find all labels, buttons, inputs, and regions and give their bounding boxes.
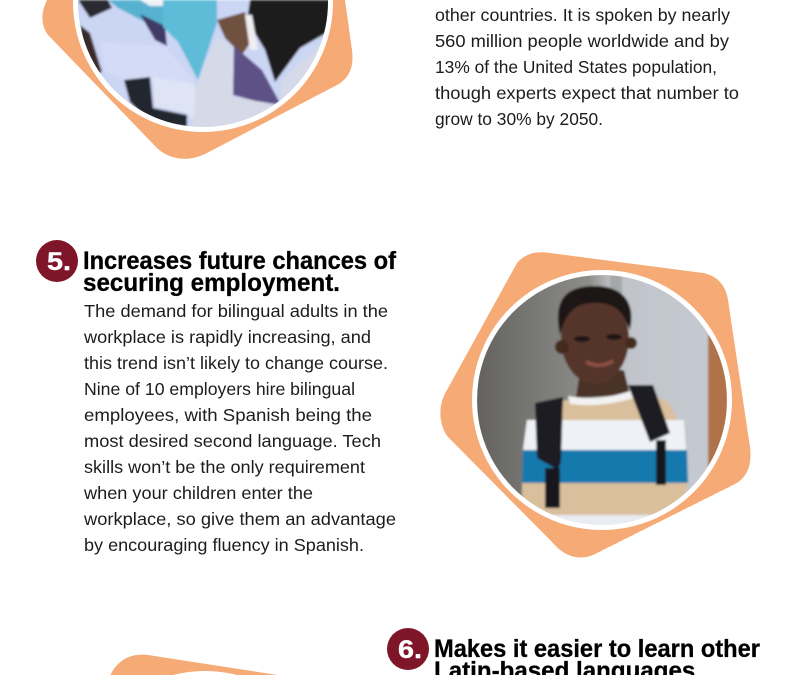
text block: Spanish speakers paragraph: other countries. It is spoken by nearly <box>435 5 730 25</box>
text block: section 5 body: Nine of 10 employers hire bilingual <box>84 379 355 399</box>
photo ring <box>73 0 333 132</box>
panel: boy with backpack photo <box>440 252 750 558</box>
text block: section 5 body: workplace is rapidly increasing, and <box>83 327 371 347</box>
blob: orange pentagon middle <box>440 252 750 558</box>
text block: Spanish speakers paragraph: 560 million people worldwide and by <box>435 31 729 51</box>
text block: section 5 body: skills won’t be the only requirement <box>84 457 365 477</box>
text block: section 5 body: when your children enter the <box>83 483 313 503</box>
photo: students with books <box>70 0 340 130</box>
heading: section 6: Makes it easier to learn other <box>434 635 760 663</box>
text block: section 5 body <box>83 301 396 555</box>
photo ring <box>472 270 732 530</box>
text block: Spanish speakers paragraph <box>435 5 739 129</box>
blob: orange pentagon bottom <box>110 654 278 675</box>
text block: section 5 body: by encouraging fluency in Spanish. <box>84 535 364 555</box>
text block: section 5 body: employees, with Spanish being the <box>84 405 372 425</box>
text block: section 5 body: The demand for bilingual adults in the <box>84 301 388 321</box>
number badge 5: 5. <box>47 248 71 276</box>
heading: section 5: securing employment. <box>83 269 340 297</box>
number badge 6: 6. <box>398 636 422 664</box>
heading: section 6 <box>434 635 760 675</box>
text block: section 5 body: most desired second language. Tech <box>84 431 381 451</box>
number badge 5 <box>36 240 78 282</box>
text block: section 5 body: workplace, so give them an advantage <box>83 509 396 529</box>
panel: students reading photo <box>42 0 352 159</box>
text block: Spanish speakers paragraph: grow to 30% by 2050. <box>435 109 603 129</box>
heading: section 5: Increases future chances of <box>83 247 397 275</box>
heading: section 5 <box>83 247 397 297</box>
blob: orange pentagon top <box>42 0 352 159</box>
number badge 6 <box>387 628 429 670</box>
text block: section 5 body: this trend isn’t likely to change course. <box>84 353 388 373</box>
text block: Spanish speakers paragraph: 13% of the United States population, <box>435 57 717 77</box>
photo: smiling boy <box>476 274 728 530</box>
text block: Spanish speakers paragraph: though experts expect that number to <box>435 83 739 103</box>
